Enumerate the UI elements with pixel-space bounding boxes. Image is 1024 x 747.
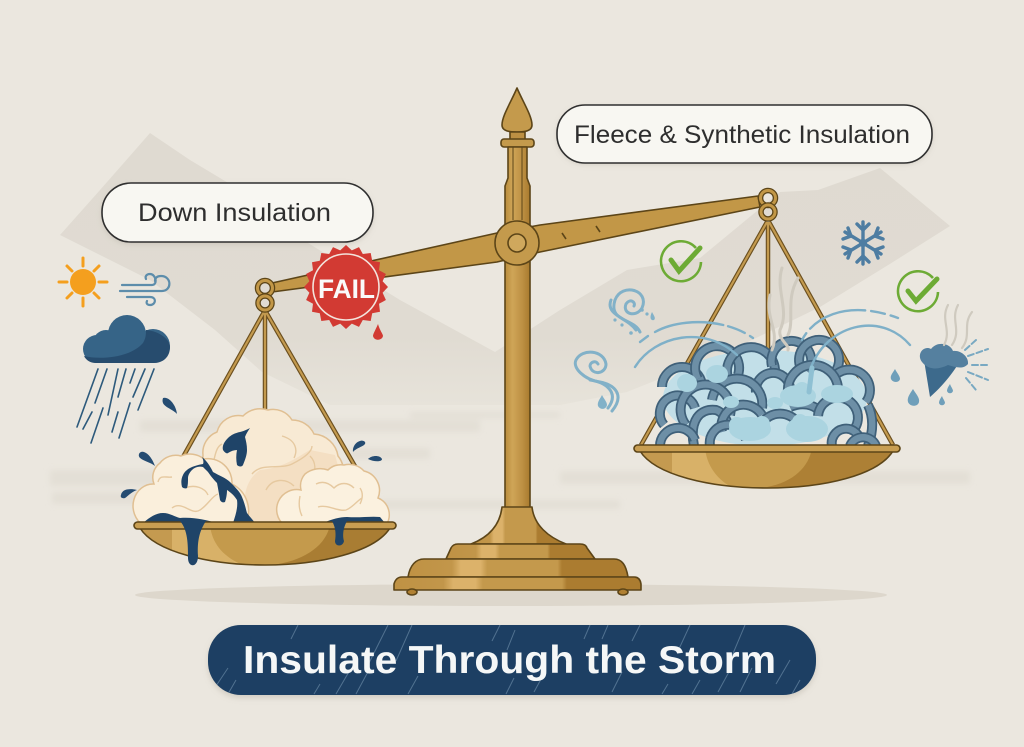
background mountains [60,133,950,405]
pillar [505,147,530,510]
string: left pan [183,312,356,468]
icon: snowflake [843,222,883,264]
steam [769,268,798,350]
title banner [208,625,816,698]
base tier mid [408,559,628,577]
water soak: stream [181,457,255,523]
finial [502,88,532,132]
icon: check badge left [661,241,701,281]
back rings [660,340,876,446]
clump: right [277,464,389,525]
right pan [630,445,900,493]
ground mist bands [50,412,970,509]
spray [965,340,990,390]
icon: rain cloud [77,315,170,443]
icon: sun [59,258,107,306]
ground shadow [135,584,887,606]
left pan [130,522,400,570]
vapor arcs: left [635,322,753,367]
scale beam [258,190,776,310]
rain streaks [77,369,154,443]
clump: middle [200,409,345,525]
label: down insulation: Down Insulation [138,199,331,227]
label: fleece and synthetic insulation [557,105,932,164]
icon: water burst [891,305,990,406]
vapor arcs: right [802,310,910,392]
base flare [471,507,566,544]
water soak: pooled left [143,513,217,526]
base tier bottom [394,577,641,590]
icon: red drop [373,324,383,340]
base tier top [446,544,595,559]
fleece rings and fibers [660,340,876,446]
label: fleece and synthetic insulation: Fleece & Synthetic Insulation [574,121,910,149]
pivot hub [495,221,539,265]
icon: wind [120,274,169,305]
icon: swirl lower left [575,352,618,411]
beam rings [258,190,776,310]
fail badge: FAIL [318,274,375,304]
label: down insulation [102,183,373,244]
clump: left [133,454,249,525]
icon: check badge right [898,271,938,311]
fail badge [304,245,388,329]
feet [407,589,417,595]
string: right pan [641,222,893,445]
left pan water drips [180,521,347,565]
burst steam [944,305,972,348]
drops [891,369,953,406]
water soak: pooled right [323,517,385,526]
fibers [677,365,853,442]
down insulation clumps [133,409,389,526]
water droplets: left [121,398,382,498]
icon: swirl upper left [610,290,655,335]
title text: Insulate Through the Storm [243,639,776,682]
water soak: blot [223,428,250,466]
scale stand [394,88,641,595]
